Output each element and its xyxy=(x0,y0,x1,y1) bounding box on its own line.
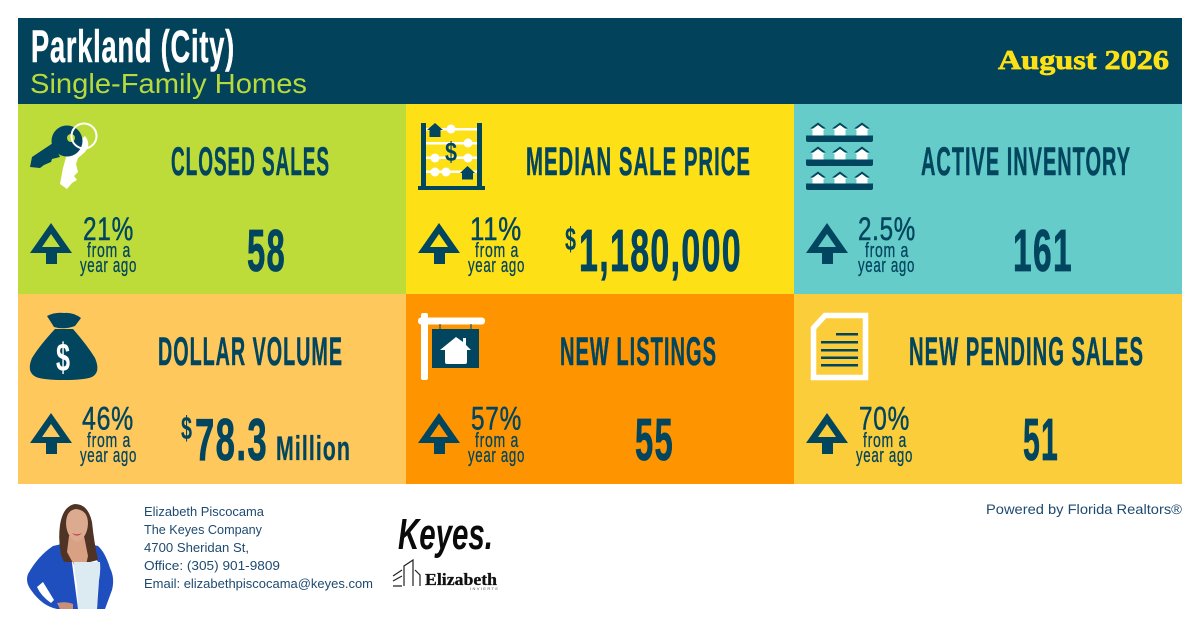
icon: abacus: $ xyxy=(445,137,457,167)
value: 51 xyxy=(1023,407,1059,473)
icon: up arrow xyxy=(30,223,72,264)
icon: up arrow xyxy=(418,223,460,264)
logo: Elizabeth Invierte xyxy=(393,560,498,591)
heading: MEDIAN SALE PRICE xyxy=(526,140,751,184)
icon: keys xyxy=(30,124,96,189)
agent contact details: Office: (305) 901-9809 xyxy=(144,559,280,573)
icon: money bag: $ xyxy=(56,336,70,380)
change text xyxy=(80,400,137,467)
agent contact details: The Keyes Company xyxy=(144,523,263,537)
change text: year ago xyxy=(80,255,137,277)
change text: 11% xyxy=(470,211,522,247)
value: 78.3 xyxy=(195,407,268,473)
value: $ xyxy=(565,221,576,257)
panel: closed sales xyxy=(18,104,406,294)
change text: year ago xyxy=(858,255,915,277)
change text xyxy=(856,400,913,467)
agent photo xyxy=(27,504,113,609)
change text: year ago xyxy=(80,445,137,467)
logo: Elizabeth Invierte: Elizabeth xyxy=(425,570,498,589)
panel: new listings xyxy=(406,294,794,484)
agent contact details: Elizabeth Piscocama xyxy=(144,505,264,519)
agent contact details: Email: elizabethpiscocama@keyes.com xyxy=(144,577,373,591)
value: Million xyxy=(276,430,351,468)
icon: abacus xyxy=(418,123,485,190)
value: $ xyxy=(181,410,192,446)
change text: from a xyxy=(475,240,519,262)
change text: from a xyxy=(87,430,131,452)
change text: 21% xyxy=(83,211,134,247)
value: 161 xyxy=(1013,218,1073,284)
panel: active inventory xyxy=(794,104,1182,294)
change text: from a xyxy=(863,430,907,452)
panel: dollar volume: DOLLAR VOLUME xyxy=(158,330,343,374)
panel: dollar volume xyxy=(18,294,406,484)
value xyxy=(565,218,742,284)
change text: from a xyxy=(87,240,131,262)
icon: up arrow xyxy=(806,223,848,264)
change text xyxy=(80,211,137,277)
value: 1,180,000 xyxy=(579,218,742,284)
change text: year ago xyxy=(468,445,525,467)
agent contact details: 4700 Sheridan St, xyxy=(144,541,249,555)
change text: 2.5% xyxy=(858,211,916,247)
heading: NEW LISTINGS xyxy=(560,330,717,374)
value: 58 xyxy=(247,218,286,284)
icon: house sign xyxy=(418,313,485,380)
icon: up arrow xyxy=(806,413,848,454)
change text: 46% xyxy=(82,400,134,436)
change text: 57% xyxy=(471,400,522,436)
header band xyxy=(18,18,1182,104)
panel: closed sales: CLOSED SALES xyxy=(171,140,330,184)
change text xyxy=(468,400,525,467)
change text: from a xyxy=(865,240,909,262)
value: 55 xyxy=(635,407,674,473)
change text xyxy=(468,211,525,277)
logo: Keyes: Keyes. xyxy=(398,510,493,559)
icon: money bag xyxy=(30,313,97,380)
panel: new pending sales xyxy=(794,294,1182,484)
panel: median sale price xyxy=(406,104,794,294)
change text xyxy=(858,211,916,277)
icon: up arrow xyxy=(30,413,72,454)
date: August 2026 xyxy=(998,45,1169,75)
change text: year ago xyxy=(468,255,525,277)
icon: up arrow xyxy=(418,413,460,454)
icon: document xyxy=(814,316,866,378)
credit line: Powered by Florida Realtors® xyxy=(986,501,1183,517)
change text: year ago xyxy=(856,445,913,467)
title: Parkland (City) xyxy=(31,21,235,72)
change text: from a xyxy=(475,430,519,452)
subtitle: Single-Family Homes xyxy=(30,68,307,99)
icon: houses on shelves xyxy=(806,122,873,190)
agent contact details xyxy=(144,505,373,591)
change text: 70% xyxy=(859,400,910,436)
logo: Elizabeth Invierte: INVIERTE xyxy=(470,586,498,591)
